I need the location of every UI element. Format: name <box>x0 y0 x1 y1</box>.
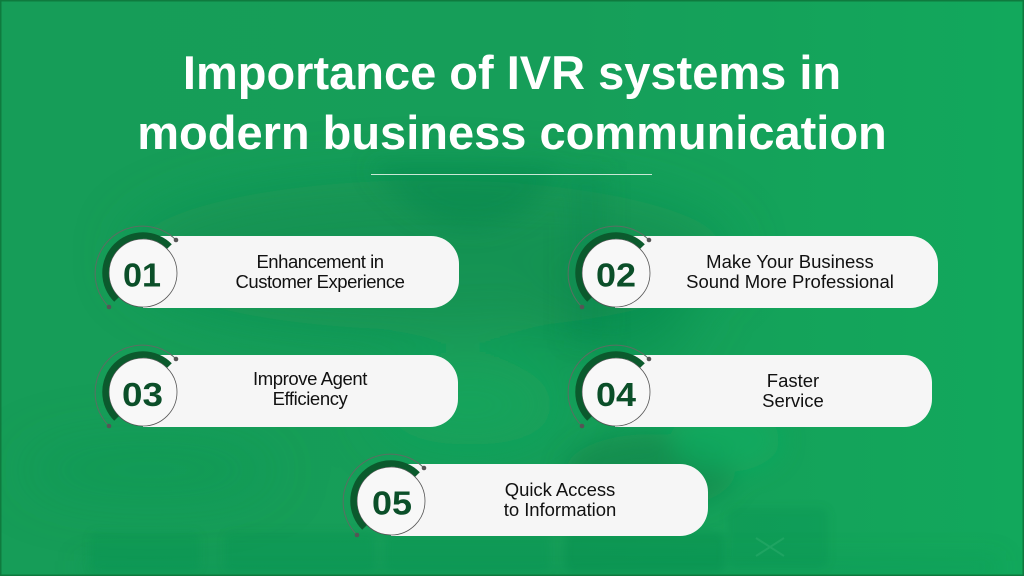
badge 04: 04 <box>596 376 637 413</box>
title divider <box>371 174 652 175</box>
text 03 <box>253 368 368 409</box>
badge 03: 03 <box>122 376 163 413</box>
text 01: Customer Experience <box>236 271 404 292</box>
badge 04 <box>568 344 652 428</box>
badge 05 <box>342 454 426 538</box>
badge 02: 02 <box>596 257 636 294</box>
badge 01 <box>94 226 178 310</box>
badge 01: 01 <box>123 257 161 294</box>
text 05: Quick Access <box>505 479 615 500</box>
text 03: Improve Agent <box>253 368 367 389</box>
item 01 <box>94 226 459 310</box>
badge 05: 05 <box>372 484 412 522</box>
pill 03 <box>143 355 458 427</box>
text 05 <box>504 479 616 520</box>
item 04 <box>568 344 932 428</box>
pill 01 <box>143 236 459 308</box>
text 01: Enhancement in <box>256 251 384 272</box>
text 03: Efficiency <box>273 388 347 409</box>
pill 05 <box>391 464 708 536</box>
text 02 <box>686 251 894 292</box>
badge 03 <box>94 344 178 428</box>
text 02: Make Your Business <box>706 251 874 272</box>
title: Importance of IVR systems in <box>183 46 841 99</box>
item 03 <box>94 344 458 428</box>
item 05 <box>342 454 708 538</box>
text 05: to Information <box>504 499 616 520</box>
item 02 <box>568 226 938 310</box>
badge 02 <box>568 226 652 310</box>
title: modern business communication <box>137 106 887 159</box>
text 01 <box>236 251 404 292</box>
text 04: Faster <box>767 370 819 391</box>
text 04: Service <box>762 390 824 411</box>
pill 02 <box>615 236 938 308</box>
text 04 <box>762 370 824 411</box>
title <box>137 46 887 159</box>
text 02: Sound More Professional <box>686 271 894 292</box>
pill 04 <box>615 355 932 427</box>
